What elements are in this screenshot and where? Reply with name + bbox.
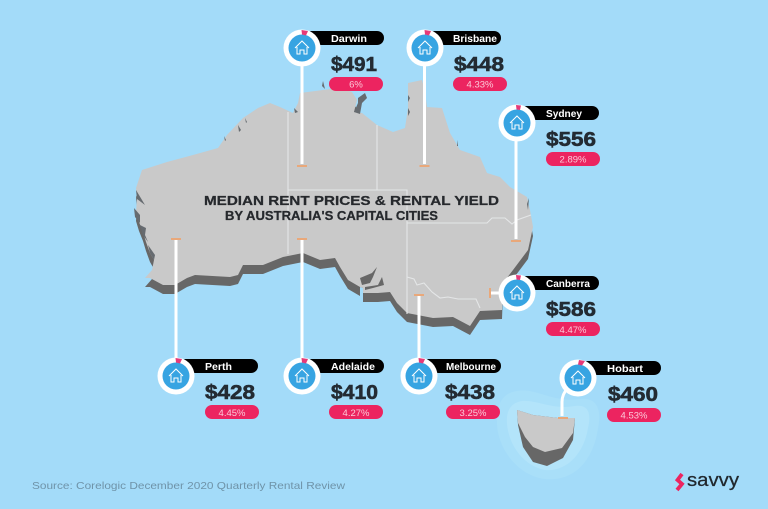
callout: Darwin: $491 (331, 54, 377, 76)
logo: savvy: savvy (687, 470, 739, 490)
callout: Adelaide (284, 239, 384, 419)
title: MEDIAN RENT PRICES & RENTAL YIELD (204, 194, 499, 208)
callout: Hobart: $460 (608, 384, 658, 406)
callout: Perth: Perth (205, 362, 232, 373)
state borders (288, 112, 531, 314)
gulf water notch (360, 287, 363, 303)
callout: Perth: $428 (205, 382, 255, 404)
callout: Sydney (498, 104, 600, 241)
callout: Sydney: Sydney (546, 109, 582, 120)
callout: Adelaide: Adelaide (331, 362, 375, 373)
title: BY AUSTRALIA'S CAPITAL CITIES (225, 209, 438, 223)
callout: Brisbane: 4.33% (467, 80, 494, 90)
callout: Brisbane (406, 30, 507, 166)
callout: Hobart: Hobart (607, 364, 644, 375)
map: Tasmania with halo (497, 390, 599, 479)
callout: Darwin: 6% (349, 80, 363, 90)
title (204, 194, 499, 223)
callout: Adelaide: 4.27% (343, 408, 370, 419)
callout: Darwin: Darwin (331, 34, 367, 45)
callout: Darwin (284, 30, 384, 166)
callout: Perth (158, 239, 259, 419)
callout: Hobart: 4.53% (621, 410, 648, 422)
callout: Brisbane: $448 (454, 54, 504, 76)
source note: Source: Corelogic December 2020 Quarterly Rental Review (32, 480, 345, 492)
callout: Canberra: $586 (546, 299, 596, 321)
callout: Melbourne: $438 (445, 382, 495, 404)
callout: Melbourne: Melbourne (446, 362, 496, 373)
callout: Sydney: 2.89% (560, 154, 587, 166)
gulf shadows (360, 267, 377, 285)
callout: Perth: 4.45% (219, 408, 246, 419)
callout: Brisbane: Brisbane (453, 34, 497, 45)
callout: Sydney: $556 (546, 129, 596, 151)
callout: Melbourne (400, 295, 501, 419)
callout: Melbourne: 3.25% (460, 408, 487, 419)
callout: Canberra: 4.47% (560, 325, 587, 336)
callout: Canberra: Canberra (546, 279, 590, 290)
callout: Adelaide: $410 (331, 382, 378, 404)
callout: Hobart (558, 360, 661, 422)
map of mainland Australia (134, 80, 533, 335)
callout: Canberra (490, 274, 600, 336)
coast and island slivers (134, 81, 529, 260)
